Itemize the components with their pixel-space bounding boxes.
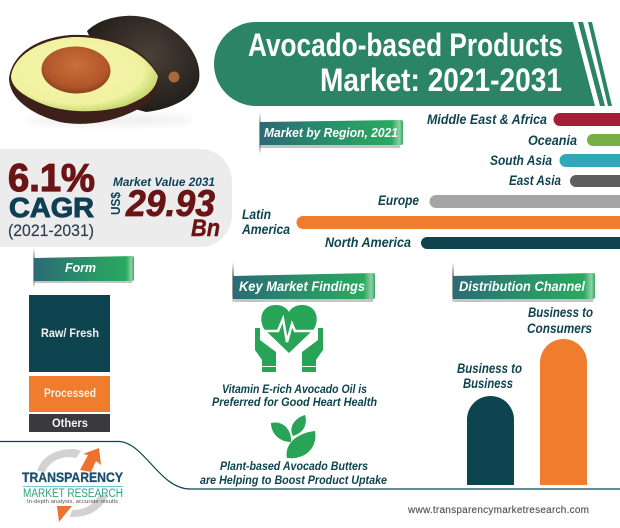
bar: business to consumers: Business to [528,305,593,320]
segment: processed: Processed [44,386,96,400]
region bar: Middle East & Africa: Middle East & Africa [427,111,547,127]
header: market by region [259,112,403,154]
bar chart: market by region [241,111,620,250]
stacked bar: form [29,295,110,432]
region bar: Latin America: America [241,221,290,237]
bar: business to business: Business [463,376,513,391]
text: finding one [212,382,377,409]
market value figure: Market Value 2031 [113,175,215,189]
region bar: North America [325,234,620,250]
CAGR figure: 6.1% [8,157,95,200]
CAGR figure: (2021-2031) [8,221,94,240]
icon: leaves [271,415,315,458]
region bar: North America: North America [325,234,411,250]
region bar: South Asia: South Asia [490,152,552,168]
bar chart: distribution channel [457,305,593,485]
region bar: Middle East & Africa [427,111,620,127]
segment: others: Others [52,416,88,430]
bar: business to business: Business to [457,361,522,376]
market value figure: US$ [108,191,123,215]
title text: Market: 2021-2031 [320,62,562,98]
website url: www.transparencymarketresearch.com [407,505,589,516]
header: key market findings: Key Market Findings [239,278,365,294]
logo: transparency market research [22,448,124,522]
text: finding two [200,459,387,487]
logo: transparency market research: MARKET RESEARCH [23,488,123,500]
footer curve line [0,442,620,489]
icon: heart in hands [255,305,323,372]
market value figure: Bn [191,215,220,242]
region bar: Latin America: Latin [242,206,271,222]
header: market by region: Market by Region, 2021 [264,125,398,140]
title text [248,27,563,98]
text: finding two: Plant-based Avocado Butters [220,459,368,473]
header: distribution channel [452,262,595,304]
logo: transparency market research: In-depth analysis, accurate results [27,499,119,505]
bar: business to business [457,361,522,485]
text: finding two: are Helping to Boost Product Uptake [200,473,387,487]
region bar: East Asia: East Asia [509,172,561,188]
bar: business to consumers [527,305,593,485]
region bar: Europe: Europe [378,192,419,208]
market value figure [108,175,220,242]
header: distribution channel: Distribution Channel [459,278,586,294]
header: form: Form [65,260,96,275]
region bar: Latin America [241,206,620,237]
segment: raw fresh: Raw/ Fresh [41,326,99,340]
region bar: Europe [378,192,620,208]
header: key market findings [232,262,375,304]
market value figure: 29.93 [125,183,215,224]
image: avocado [9,16,199,125]
region bar: Oceania [528,132,620,148]
text: finding one: Preferred for Good Heart Health [212,395,377,409]
region bar: Oceania: Oceania [528,132,577,148]
logo: transparency market research: TRANSPARENCY [22,469,124,485]
bar: business to consumers: Consumers [527,321,592,336]
text: finding one: Vitamin E-rich Avocado Oil is [222,382,367,396]
title banner [214,22,612,106]
region bar: East Asia [509,172,620,188]
header: form [33,248,134,288]
panel: CAGR and market value [0,149,232,247]
CAGR figure: CAGR [9,192,94,223]
region bar: South Asia [490,152,620,168]
CAGR figure [8,157,95,240]
